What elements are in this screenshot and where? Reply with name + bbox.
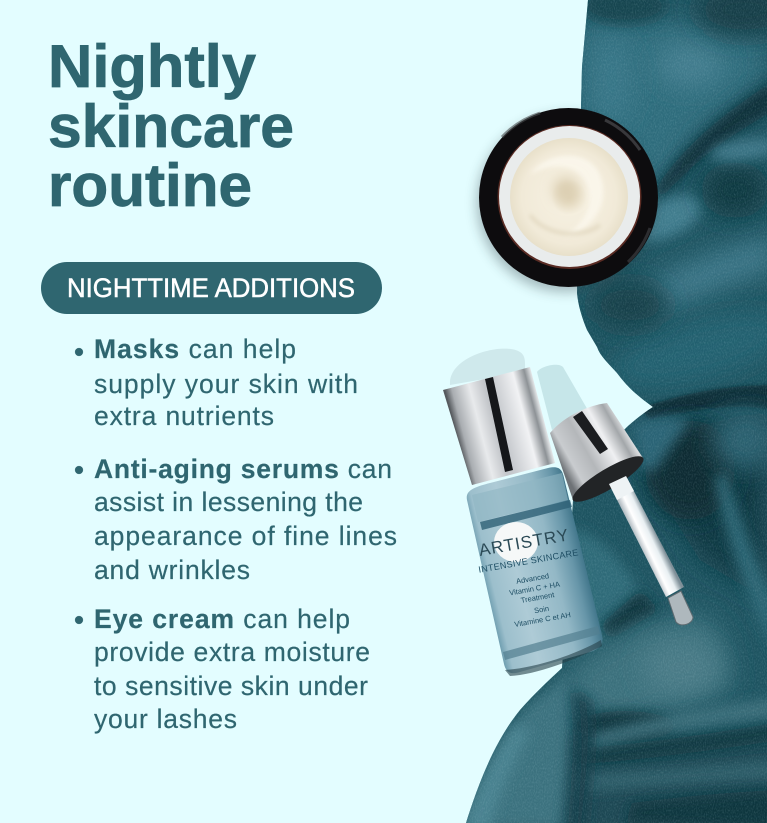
bottle glass body <box>467 467 602 673</box>
heading pill: nighttime additions: NIGHTTIME ADDITIONS <box>67 273 355 303</box>
bullet: anti-aging serums: assist in lessening the <box>94 487 363 517</box>
bottle label text: Treatment <box>520 590 556 605</box>
bottle label text <box>477 525 579 629</box>
bullet: eye cream <box>75 604 370 734</box>
serum dropper <box>537 365 693 625</box>
diagonal dark fold <box>655 80 767 200</box>
lower lit bulge <box>560 615 731 730</box>
collar underside <box>568 449 648 509</box>
bullet: eye cream: provide extra moisture <box>94 637 370 667</box>
bullet: anti-aging serums: appearance of fine lines <box>94 521 397 551</box>
lower dark zone <box>670 422 767 591</box>
lower bands <box>566 744 767 823</box>
top dark folds <box>583 0 667 24</box>
bullet: anti-aging serums: and wrinkles <box>94 555 250 585</box>
bullet: masks: Masks can help <box>94 334 296 364</box>
heading pill: nighttime additions <box>41 262 382 314</box>
bottom <box>580 760 767 792</box>
fold under upper panel <box>640 385 767 420</box>
bullet: masks: supply your skin with <box>94 369 358 399</box>
title <box>48 33 294 219</box>
title: Nightly <box>48 33 257 100</box>
bullet: eye cream: your lashes <box>94 704 237 734</box>
bottle stopper <box>450 349 525 385</box>
deep fold <box>575 711 675 741</box>
dropper stopper <box>537 365 589 430</box>
serum bottle <box>443 349 602 676</box>
bullet list <box>75 334 397 734</box>
white inner rim <box>499 126 640 267</box>
bottle label text: ARTISTRY <box>477 525 571 560</box>
teal satin fabric <box>460 0 767 823</box>
cream jar <box>477 108 658 292</box>
dropper glass tube <box>609 476 684 597</box>
upper lit panel <box>581 14 767 184</box>
bottle label text: Vitamine C et AH <box>514 610 571 629</box>
bullet: eye cream: to sensitive skin under <box>94 671 368 701</box>
cream <box>510 138 628 256</box>
satin grain <box>460 0 767 823</box>
bullet: anti-aging serums: Anti-aging serums can <box>94 454 392 484</box>
bullet: masks <box>75 334 358 431</box>
bullet: masks: extra nutrients <box>94 401 274 431</box>
bottle label text: Vitamin C + HA <box>509 580 561 597</box>
lit left fall <box>462 675 569 823</box>
title: skincare <box>48 93 294 160</box>
dropper silver collar <box>550 403 643 500</box>
bullet: eye cream: Eye cream can help <box>94 604 350 634</box>
dropper tip <box>668 591 693 625</box>
bottle label text: INTENSIVE SKINCARE <box>478 547 579 575</box>
bullet: anti-aging serums <box>75 454 397 585</box>
fabric behind the bottle <box>577 530 640 639</box>
bottle label text: Soin <box>533 604 550 615</box>
bottle silver cap <box>443 367 555 485</box>
mid highlights <box>645 190 706 246</box>
title: routine <box>48 152 252 219</box>
bottle label text: Advanced <box>515 571 550 586</box>
